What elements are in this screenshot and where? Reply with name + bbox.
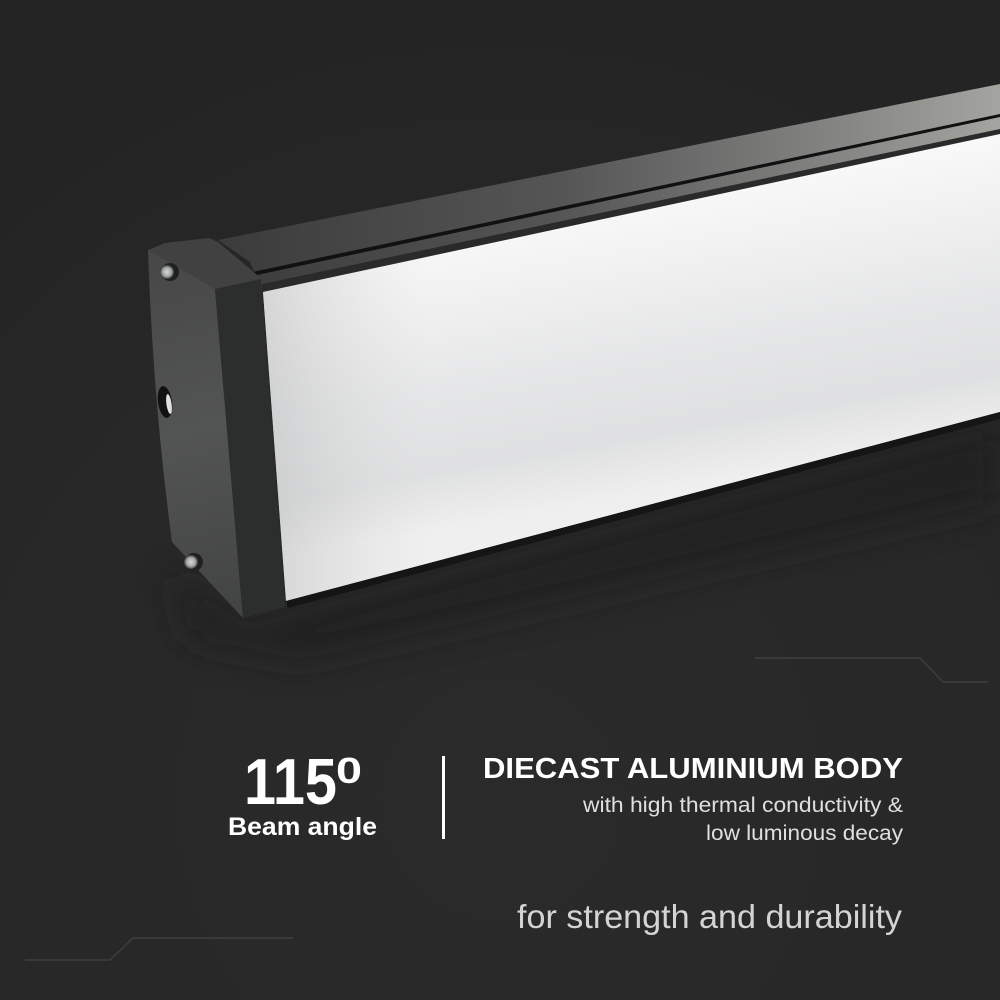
- lamp top housing: [218, 84, 1000, 290]
- end cap front strip: [215, 279, 285, 618]
- diffuser left shading: [263, 256, 450, 601]
- bottom screw: [184, 553, 203, 571]
- heading: DIECAST ALUMINIUM BODY: [483, 753, 903, 785]
- description line 1: with high thermal conductivity &: [582, 794, 903, 817]
- beam angle value: 115: [244, 745, 337, 818]
- floor shadow under the lamp: [170, 425, 1000, 660]
- housing groove: [252, 114, 1000, 276]
- decorative line: upper right: [755, 658, 988, 682]
- bottom black edge: [286, 412, 1000, 608]
- product: LED linear lamp: [148, 84, 1000, 618]
- end cap side plate: [148, 250, 243, 618]
- beam angle label: Beam angle: [228, 813, 377, 841]
- degree mark: 0: [336, 750, 362, 791]
- housing lower edge: [262, 129, 1000, 293]
- cable hole: [156, 385, 174, 419]
- diffuser panel: [263, 134, 1000, 601]
- top screw: [160, 263, 179, 281]
- vertical divider: [442, 756, 445, 839]
- description line 2: low luminous decay: [706, 822, 904, 845]
- end cap top: [148, 238, 262, 290]
- decorative line: lower left: [25, 938, 293, 960]
- tagline: for strength and durability: [517, 898, 903, 935]
